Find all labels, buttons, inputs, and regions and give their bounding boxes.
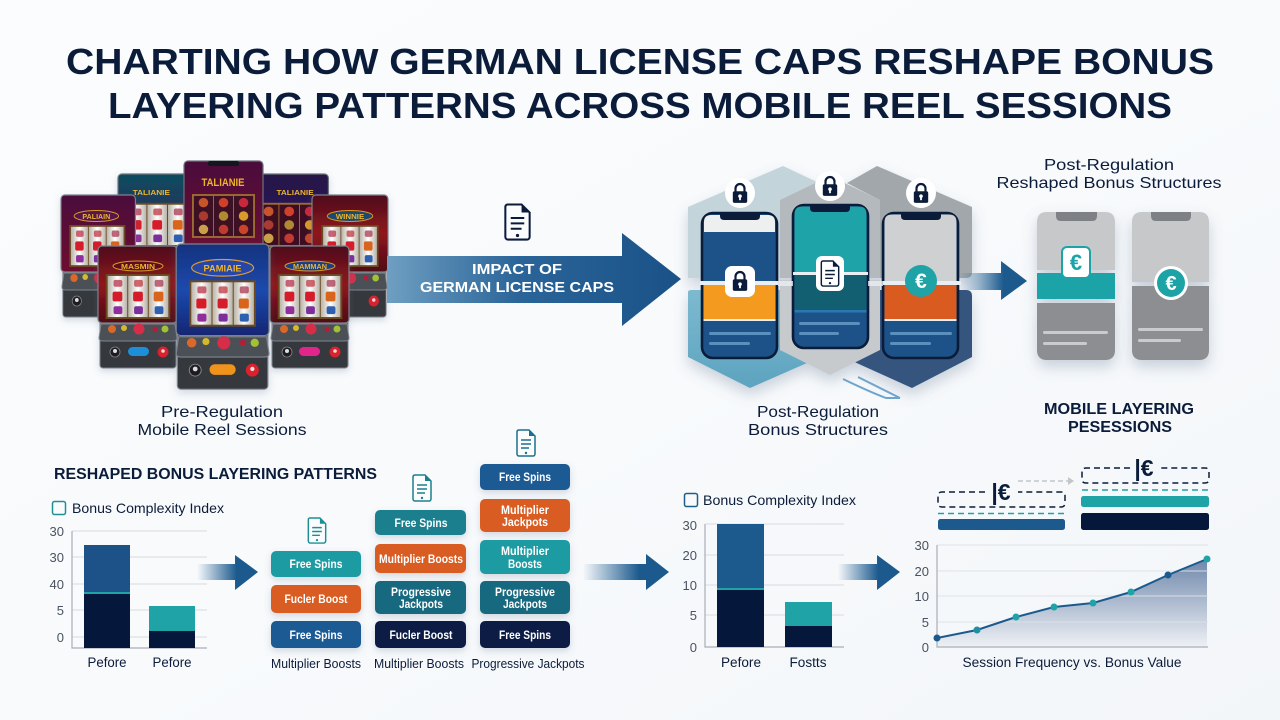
- bonus block: Free Spins: [290, 559, 342, 571]
- bonus block: [480, 621, 570, 648]
- slot machine: front centre: [176, 244, 269, 389]
- icon: euro badge round: €: [1165, 273, 1177, 295]
- bar chart: bonus complexity index left: 5: [57, 603, 64, 618]
- legend: Bonus Complexity Index: [72, 500, 224, 516]
- bonus block: Boosts: [508, 559, 542, 571]
- icon: document: [517, 430, 535, 456]
- stack captions: Multiplier Boosts: [374, 657, 464, 671]
- stack captions: Progressive Jackpots: [472, 657, 584, 671]
- bonus block: Free Spins: [499, 472, 551, 484]
- icon: document above arrow: [505, 204, 530, 240]
- bonus block: Fucler Boost: [390, 630, 453, 642]
- label: post-regulation bonus structures: [748, 404, 888, 439]
- bonus block: Fucler Boost: [284, 594, 348, 606]
- label: pre-regulation: Pre-Regulation: [161, 404, 283, 421]
- icon: euro badge: [905, 265, 937, 297]
- heading: reshaped bonus layering patterns: RESHAPED BONUS LAYERING PATTERNS: [54, 466, 377, 483]
- slot machine: back centre: TALIANIE: [202, 177, 244, 189]
- arrow: chart to line chart: [838, 555, 900, 590]
- layer diagram: before: |€: [991, 479, 1011, 505]
- slot machine: front centre: PAMIAIE: [204, 263, 242, 274]
- panel: post-regulation phones on hexagons: [688, 166, 972, 398]
- bonus block: [375, 510, 466, 535]
- layer diagram: before: [938, 479, 1065, 530]
- arrow: impact of German license caps: [387, 233, 681, 326]
- phone: reshaped right: [1132, 212, 1209, 360]
- bar chart: bonus complexity index left: 30: [50, 550, 64, 565]
- label: pre-regulation: [138, 404, 306, 439]
- slot machine: front left: [98, 246, 177, 368]
- title: CHARTING HOW GERMAN LICENSE CAPS RESHAPE BONUS: [66, 41, 1214, 82]
- bonus block: Jackpots: [502, 517, 548, 529]
- bonus block: [480, 540, 570, 574]
- label: post-regulation bonus structures: Bonus Structures: [748, 422, 888, 439]
- hexagon backgrounds: [688, 166, 972, 388]
- bonus block: Multiplier: [501, 505, 549, 517]
- bar chart: bonus complexity index left: 40: [50, 577, 64, 592]
- bonus block: Free Spins: [290, 630, 342, 642]
- heading: reshaped bonus structures: Reshaped Bonus Structures: [996, 175, 1222, 192]
- slot machine: back centre: [184, 161, 263, 261]
- phone: centre: [793, 205, 868, 348]
- bonus block: [480, 581, 570, 614]
- slot machine: front right: MAMMAN: [293, 264, 327, 271]
- bonus block: Free Spins: [499, 630, 551, 642]
- layer diagram: after: [1081, 455, 1209, 530]
- slot machine: front right: [270, 246, 349, 368]
- line chart: session frequency vs bonus value: 5: [922, 615, 929, 630]
- slot machine: back left: [118, 174, 196, 291]
- arrow: chart to stacks: [197, 555, 258, 590]
- stack: column one: [271, 518, 361, 648]
- line chart: session frequency vs bonus value: [915, 538, 1210, 670]
- decorative swoosh: [843, 377, 900, 398]
- stack captions: Multiplier Boosts: [271, 657, 361, 671]
- bar chart: bonus complexity index left: Pefore: [152, 655, 192, 670]
- title: LAYERING PATTERNS ACROSS MOBILE REEL SESSIONS: [108, 85, 1172, 126]
- phone: left: [702, 213, 777, 358]
- icon: lock badge: [725, 266, 755, 297]
- bonus block: Progressive: [495, 587, 555, 599]
- bonus block: Free Spins: [394, 518, 448, 530]
- stack: column three: [480, 430, 570, 648]
- icon: document badge: [816, 256, 844, 291]
- label: post-regulation bonus structures: Post-Regulation: [757, 404, 879, 421]
- icon: document: [308, 518, 326, 543]
- arrow: dashed grey: [1018, 477, 1074, 485]
- line chart: session frequency vs bonus value: 20: [915, 564, 929, 579]
- legend: Bonus Complexity Index: [703, 492, 856, 508]
- slot machine: middle left: PALIAIN: [82, 214, 110, 221]
- bar chart: bonus complexity index right: 0: [690, 640, 697, 655]
- arrow: impact of German license caps: GERMAN LICENSE CAPS: [420, 279, 614, 296]
- line chart: session frequency vs bonus value: 0: [922, 640, 929, 655]
- slot machine: back left: TALIANIE: [133, 188, 170, 197]
- bonus block: [480, 464, 570, 490]
- bar chart: bonus complexity index right: 20: [683, 548, 697, 563]
- bonus block: [375, 544, 466, 573]
- bar chart: bonus complexity index right: Fostts: [790, 655, 827, 670]
- line chart: session frequency vs bonus value: 30: [915, 538, 929, 553]
- stack: column two: [375, 475, 466, 648]
- icon: euro badge square: [1062, 247, 1090, 278]
- bar chart: bonus complexity index right: [683, 492, 856, 670]
- slot machine: middle right: WINNIE: [336, 214, 365, 221]
- label: mobile layering sessions: [1044, 401, 1194, 436]
- slot machine: back right: TALIANIE: [276, 188, 314, 197]
- bar chart: bonus complexity index right: 30: [683, 518, 697, 533]
- slot machine: middle left: [61, 195, 135, 317]
- phone: reshaped left: [1037, 212, 1115, 360]
- heading: reshaped bonus structures: [996, 157, 1222, 192]
- bonus block: Progressive: [391, 587, 451, 599]
- stack captions: [271, 657, 584, 671]
- bonus block: Jackpots: [503, 599, 547, 611]
- bonus block: Multiplier Boosts: [379, 554, 463, 566]
- slot machine: back right: [250, 174, 328, 291]
- layer diagram: after: |€: [1134, 455, 1154, 481]
- icon: euro badge: €: [915, 270, 927, 293]
- bonus block: [480, 499, 570, 532]
- bar chart: bonus complexity index right: 5: [690, 608, 697, 623]
- bar chart: bonus complexity index left: Pefore: [88, 655, 126, 670]
- bonus block: Jackpots: [399, 599, 443, 611]
- arrow: to reshaped phones: [960, 261, 1027, 300]
- label: pre-regulation: Mobile Reel Sessions: [138, 422, 306, 439]
- label: mobile layering sessions: MOBILE LAYERING: [1044, 401, 1194, 418]
- title: [66, 41, 1214, 126]
- bonus block: Multiplier: [501, 546, 549, 558]
- light band: [700, 272, 961, 286]
- bonus block: [375, 581, 466, 614]
- phone: right: [883, 213, 958, 358]
- icon: euro badge square: €: [1070, 250, 1082, 275]
- bar chart: bonus complexity index left: [50, 500, 224, 670]
- line chart: session frequency vs bonus value: 10: [915, 589, 929, 604]
- arrow: impact of German license caps: IMPACT OF: [472, 261, 562, 278]
- icon: document: [413, 475, 431, 501]
- heading: reshaped bonus structures: Post-Regulation: [1044, 157, 1174, 174]
- bonus block: [375, 621, 466, 648]
- slot machine: middle right: [312, 195, 388, 317]
- icon: lock badges on top: [725, 171, 936, 208]
- icon: euro badge round: [1154, 266, 1188, 300]
- bar chart: bonus complexity index right: Pefore: [721, 655, 761, 670]
- panel: pre-regulation slot machines: [61, 161, 388, 389]
- slot machine: front left: MASMIN: [121, 264, 155, 271]
- bar chart: bonus complexity index left: 30: [50, 524, 64, 539]
- arrow: stacks to chart: [583, 554, 669, 590]
- line chart: session frequency vs bonus value: Session Frequency vs. Bonus Value: [962, 655, 1182, 670]
- bar chart: bonus complexity index right: 10: [683, 578, 697, 593]
- label: mobile layering sessions: PESESSIONS: [1068, 419, 1172, 436]
- bar chart: bonus complexity index left: 0: [57, 630, 64, 645]
